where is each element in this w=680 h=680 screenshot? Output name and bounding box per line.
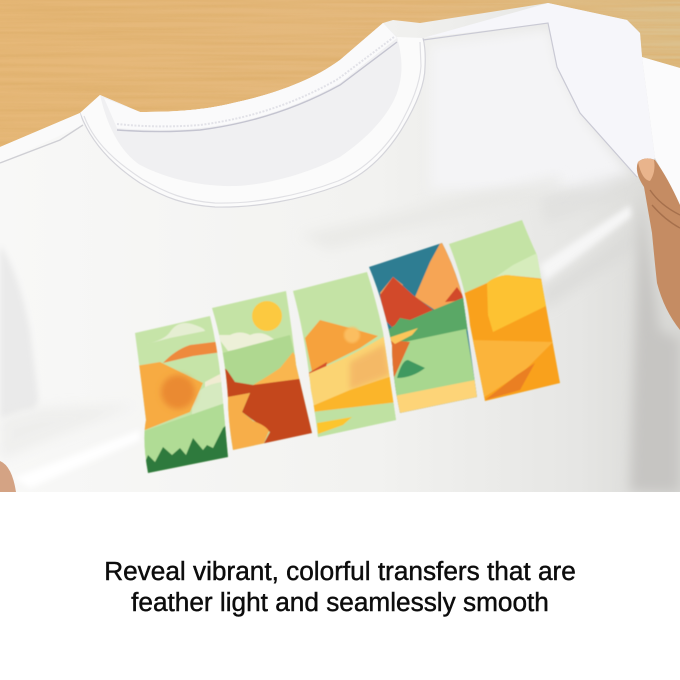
fabric shading folds	[0, 172, 680, 492]
t-shirt body	[0, 3, 680, 492]
back neckband	[104, 23, 397, 130]
panel 2: sun, cloud, red mountain	[212, 290, 313, 451]
left hand holding shirt	[0, 461, 16, 492]
caption text: feather light and seamlessly smooth	[131, 587, 549, 617]
left sleeve shape under fabric	[0, 245, 38, 418]
panel 5: desert dunes	[445, 215, 565, 405]
photo: white t-shirt on wooden table with printed transfer	[0, 0, 680, 492]
upper chest highlight	[430, 28, 632, 190]
printed transfer design	[125, 215, 565, 480]
right sleeve	[642, 57, 680, 205]
interior back of the shirt, inside neck opening	[100, 23, 402, 186]
panel 1: mountain and trees	[134, 316, 229, 474]
right shoulder yoke and seam	[423, 3, 655, 177]
panel 4: teal sky and red peaks	[368, 242, 478, 414]
wood table background	[0, 0, 680, 200]
right hand holding shirt	[637, 158, 680, 330]
caption text	[104, 556, 576, 617]
left shoulder seam	[0, 113, 83, 163]
front collar ribbing	[80, 37, 425, 207]
sun	[252, 301, 282, 331]
caption text: Reveal vibrant, colorful transfers that are	[104, 556, 576, 586]
panel 3: mountain and yellow swoosh	[292, 272, 396, 438]
